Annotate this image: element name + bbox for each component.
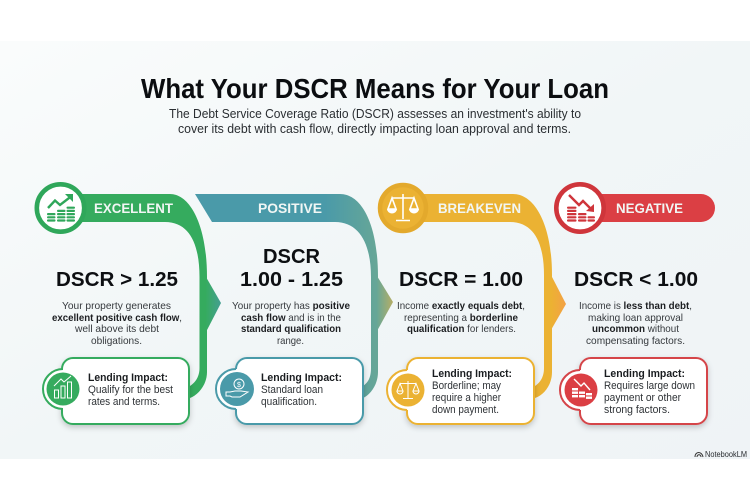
description: excellent: Your property generates xyxy=(62,300,171,312)
DSCR value: excellent: DSCR > 1.25 xyxy=(56,268,178,291)
description: negative: Income is less than debt, xyxy=(579,300,692,312)
ribbon: breakeven xyxy=(403,194,566,398)
callout: positive xyxy=(216,358,363,424)
description: breakeven: qualification for lenders. xyxy=(407,323,516,335)
title: What Your DSCR Means for Your Loan xyxy=(141,73,609,104)
callout: breakeven xyxy=(387,358,534,424)
callout: negative: strong factors. xyxy=(604,404,670,416)
icon: falling chart with coins xyxy=(556,184,604,232)
icon: hand with dollar coin: $ xyxy=(237,382,241,389)
callout: negative: Requires large down xyxy=(604,380,695,392)
description: excellent: excellent positive cash flow, xyxy=(52,312,182,324)
icon: hand with dollar coin xyxy=(220,372,254,406)
callout: negative: payment or other xyxy=(604,392,681,404)
callout: excellent: Lending Impact: xyxy=(88,372,168,384)
subtitle xyxy=(169,106,581,136)
subtitle: cover its debt with cash flow, directly impacting loan approval and terms. xyxy=(178,121,571,136)
description: positive: standard qualification xyxy=(241,323,341,335)
callout: positive: Lending Impact: xyxy=(261,372,342,384)
description: excellent: well above its debt xyxy=(74,323,159,335)
description: breakeven xyxy=(397,300,525,335)
callout: breakeven: require a higher xyxy=(432,392,501,404)
description: positive: range. xyxy=(277,335,304,347)
description: positive: cash flow and is in the xyxy=(241,312,341,324)
callout: excellent: Qualify for the best xyxy=(88,384,173,396)
callout: breakeven: Borderline; may xyxy=(432,380,502,392)
subtitle: The Debt Service Coverage Ratio (DSCR) assesses an investment's ability to xyxy=(169,106,581,121)
icon: growth chart with coins xyxy=(37,184,84,232)
ribbon: breakeven: BREAKEVEN xyxy=(438,201,521,216)
callout: negative xyxy=(560,358,707,424)
DSCR value: breakeven: DSCR = 1.00 xyxy=(399,268,523,291)
DSCR value: negative: DSCR < 1.00 xyxy=(574,268,698,291)
callout: excellent: rates and terms. xyxy=(88,396,160,408)
description: excellent xyxy=(52,300,182,347)
ribbon: excellent xyxy=(61,194,221,398)
description: positive: Your property has positive xyxy=(232,300,350,312)
description: breakeven: Income exactly equals debt, xyxy=(397,300,525,312)
DSCR value: positive xyxy=(240,245,343,291)
icon: small scales xyxy=(392,374,424,406)
icon: bar chart growth xyxy=(46,372,80,406)
ribbon: positive: POSITIVE xyxy=(258,201,322,216)
callout: breakeven: down payment. xyxy=(432,404,499,416)
description: excellent: obligations. xyxy=(91,335,142,347)
description: negative xyxy=(579,300,692,347)
ribbon: negative: NEGATIVE xyxy=(616,201,683,216)
callout: negative: Lending Impact: xyxy=(604,368,685,380)
callout: positive: qualification. xyxy=(261,396,317,408)
callout: breakeven: Lending Impact: xyxy=(432,368,512,380)
description: negative: making loan approval xyxy=(588,312,683,324)
ribbon: excellent: EXCELLENT xyxy=(94,201,174,216)
DSCR value: positive: DSCR xyxy=(263,245,320,268)
icon: small falling coins xyxy=(564,374,598,406)
description: negative: compensating factors. xyxy=(586,335,685,347)
ribbon: negative xyxy=(581,194,715,222)
description: breakeven: representing a borderline xyxy=(404,312,518,324)
callout: positive: Standard loan xyxy=(261,384,323,396)
description: negative: uncommon without xyxy=(592,323,679,335)
DSCR value: positive: 1.00 - 1.25 xyxy=(240,268,343,291)
callout: excellent xyxy=(43,358,189,424)
description: positive xyxy=(232,300,350,347)
ribbon: positive xyxy=(195,194,393,398)
icon: scales xyxy=(380,185,426,231)
